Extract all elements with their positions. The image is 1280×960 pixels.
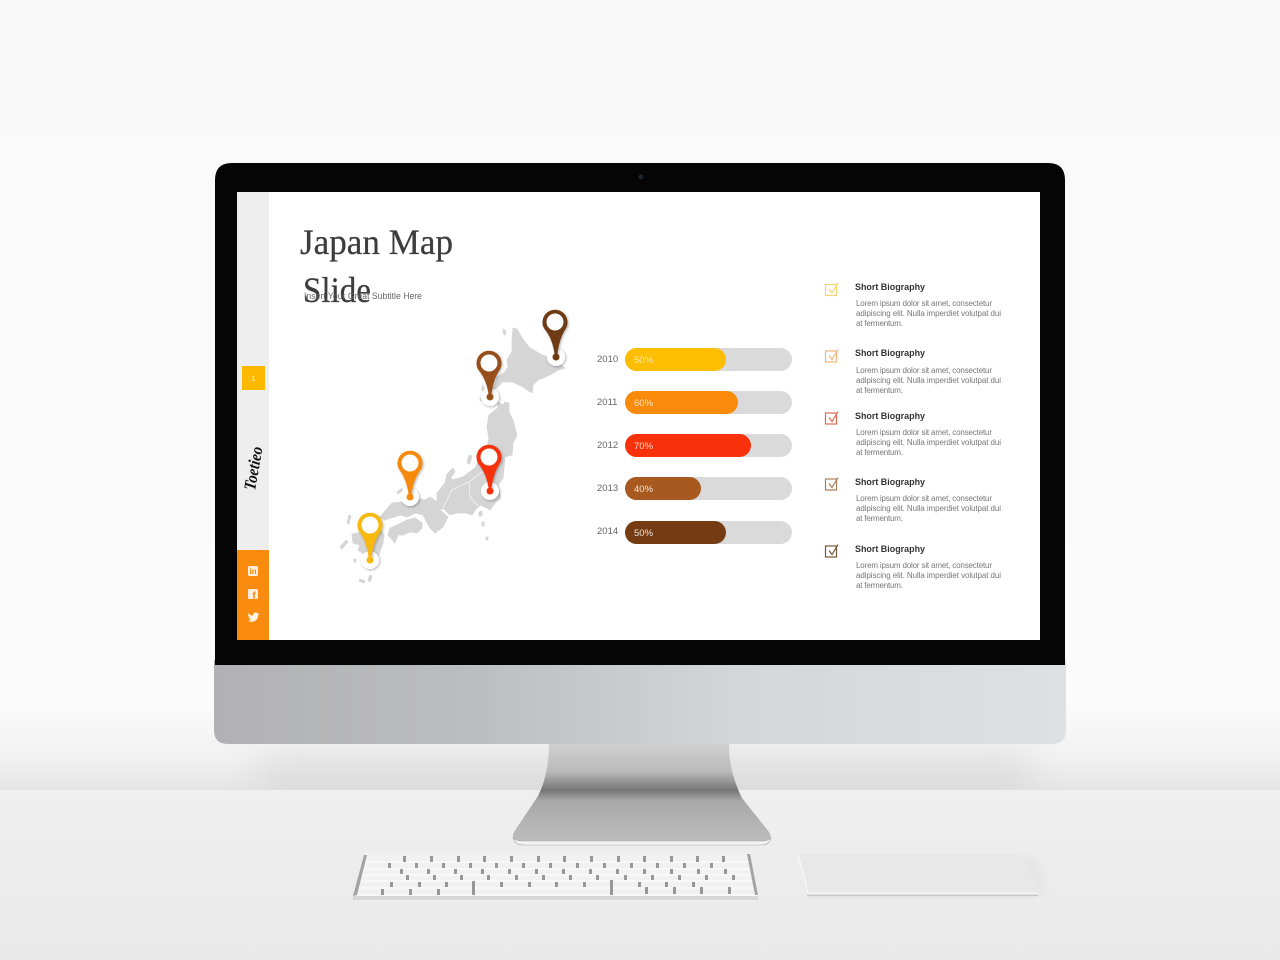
item 1: Short Biography: [855, 282, 926, 293]
icon: twitter: [248, 612, 259, 622]
bar 2012: 2012: [597, 440, 618, 451]
item 5: Short Biography: [855, 544, 926, 555]
title: Slide: [303, 270, 371, 310]
subtitle: Insert Your Great Subtitle Here: [304, 291, 422, 301]
page number badge: 1: [252, 376, 256, 383]
icon: orange check: [826, 350, 838, 362]
bar 2013: 40%: [634, 484, 654, 495]
bar chart: [597, 348, 792, 544]
bar 2010: [597, 348, 792, 371]
bar 2012: 70%: [634, 441, 654, 452]
icon: dark brown check: [826, 544, 838, 557]
item 5: adipiscing elit. Nulla imperdiet volutpat dui: [856, 571, 1001, 580]
map pin: chugoku: [397, 451, 422, 506]
icon: brown check: [826, 478, 838, 490]
screen: [237, 192, 1040, 640]
item 4: Lorem ipsum dolor sit amet, consectetur: [856, 494, 992, 503]
bar 2014: [597, 521, 792, 544]
bar 2011: 60%: [634, 398, 654, 409]
icon: facebook: f: [252, 591, 256, 602]
item 3: at fermentum.: [856, 448, 903, 457]
item 5: [826, 544, 1001, 590]
checklist: [826, 282, 1001, 590]
bar 2011: [597, 391, 792, 414]
item 2: [826, 348, 1001, 395]
item 4: adipiscing elit. Nulla imperdiet volutpat dui: [856, 504, 1001, 513]
item 1: [826, 282, 1001, 328]
japan map: [340, 328, 565, 583]
title: Japan Map: [300, 222, 453, 262]
item 3: adipiscing elit. Nulla imperdiet volutpat dui: [856, 438, 1001, 447]
item 4: Short Biography: [855, 477, 926, 488]
bar 2010: 2010: [597, 354, 618, 365]
bar 2010: 50%: [634, 355, 654, 366]
trackpad: [797, 853, 1046, 898]
bar 2013: 2013: [597, 483, 618, 494]
bar 2011: 2011: [597, 397, 617, 408]
monitor chin: [214, 660, 1066, 744]
brand name: Toetieo: [240, 445, 267, 492]
item 1: at fermentum.: [856, 319, 903, 328]
icon: red check: [826, 412, 838, 424]
sidebar: [237, 192, 269, 640]
bar 2012: [597, 434, 792, 457]
item 1: adipiscing elit. Nulla imperdiet volutpat dui: [856, 309, 1001, 318]
item 2: Lorem ipsum dolor sit amet, consectetur: [856, 366, 992, 375]
item 2: Short Biography: [855, 348, 926, 359]
social panel: [237, 550, 269, 640]
icon: yellow check: [826, 283, 838, 296]
item 5: at fermentum.: [856, 581, 903, 590]
item 1: Lorem ipsum dolor sit amet, consectetur: [856, 299, 992, 308]
item 2: adipiscing elit. Nulla imperdiet volutpat dui: [856, 376, 1001, 385]
monitor stand: [513, 744, 771, 845]
desk surface: [0, 790, 1280, 960]
keyboard: [353, 853, 758, 901]
item 3: [826, 411, 1001, 457]
map pin: hokkaido: [542, 310, 567, 366]
bar 2014: 2014: [597, 526, 618, 537]
item 4: at fermentum.: [856, 514, 903, 523]
map pin: aomori: [476, 351, 502, 406]
monitor bezel: [215, 163, 1065, 665]
item 5: Lorem ipsum dolor sit amet, consectetur: [856, 561, 992, 570]
item 4: [826, 477, 1001, 523]
map pin: tokyo: [476, 445, 501, 500]
map pin: kyushu: [358, 513, 382, 569]
bar 2013: [597, 477, 792, 500]
monitor shadow on wall: [269, 751, 1021, 790]
page number badge: [242, 366, 265, 390]
item 3: Lorem ipsum dolor sit amet, consectetur: [856, 428, 992, 437]
bar 2014: 50%: [634, 528, 654, 539]
icon: linkedin: in: [249, 567, 257, 576]
webcam: [639, 175, 643, 179]
item 3: Short Biography: [855, 411, 926, 422]
item 2: at fermentum.: [856, 386, 903, 395]
monitor: [214, 163, 1066, 744]
